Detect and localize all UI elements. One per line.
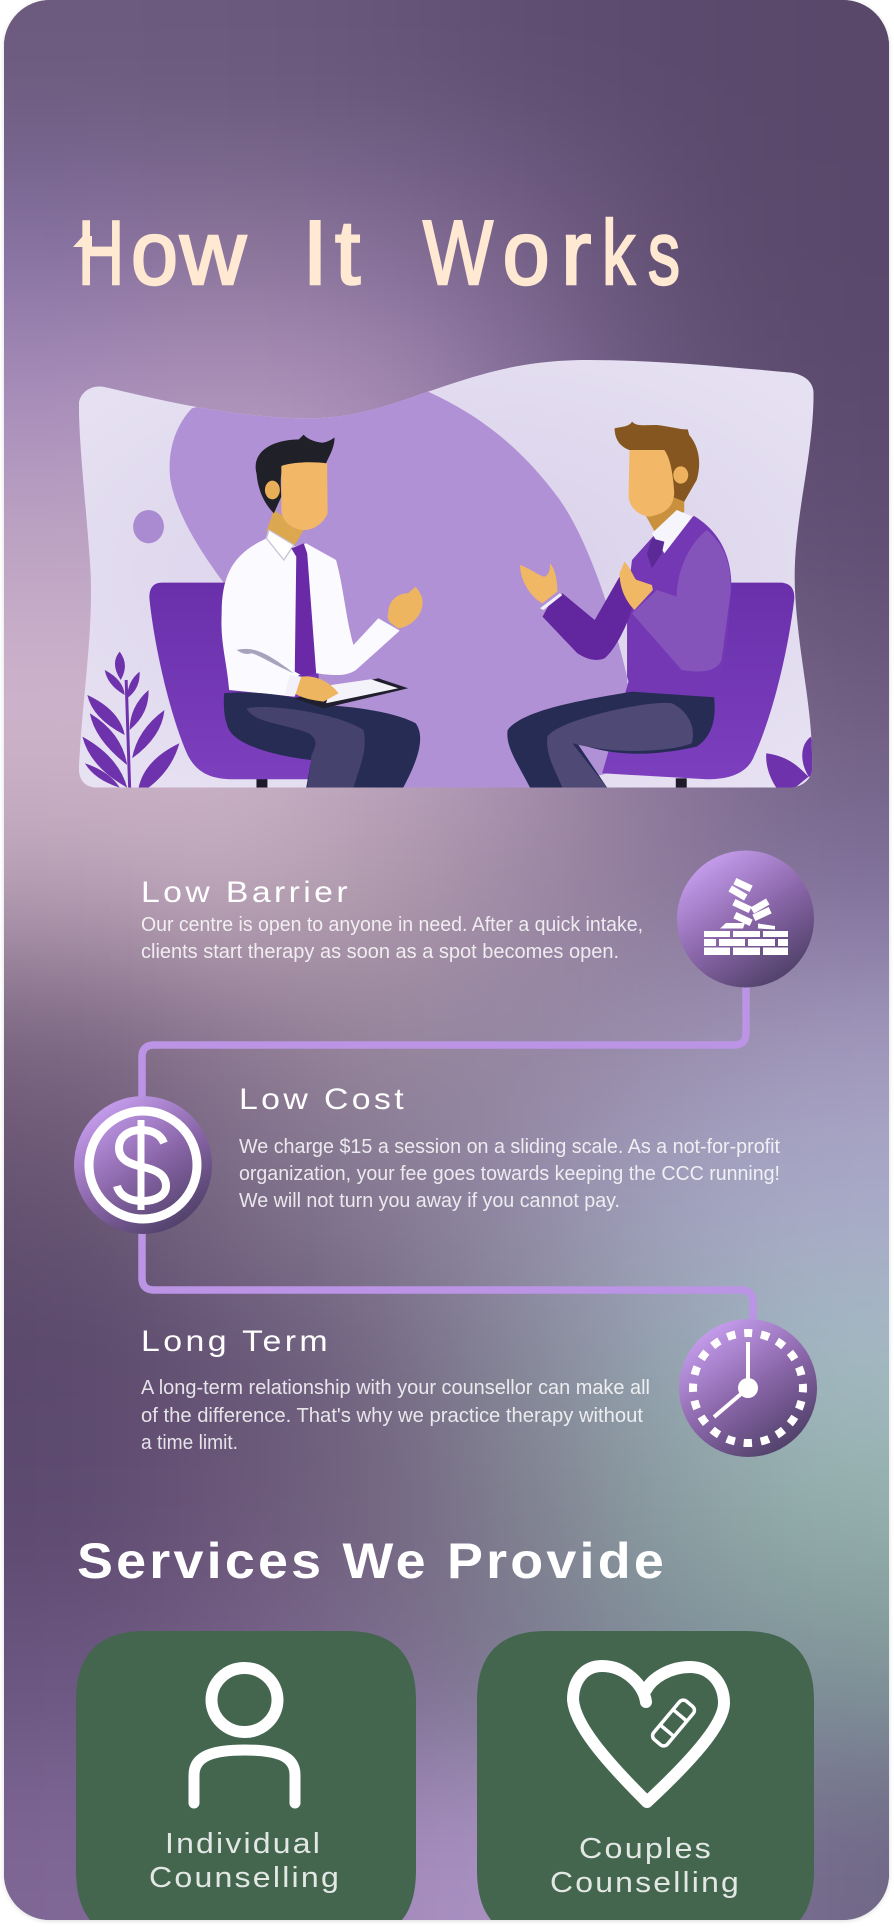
title: o bbox=[131, 203, 178, 304]
plant left bbox=[82, 652, 179, 788]
title: r bbox=[561, 203, 591, 304]
plant right bbox=[766, 737, 816, 788]
card: individual counselling: Counselling bbox=[149, 1862, 341, 1894]
title: o bbox=[503, 203, 550, 304]
step: long term bbox=[141, 1325, 650, 1454]
illustration: counsellor and client bbox=[60, 360, 840, 788]
icon: dollar coin bbox=[74, 1096, 212, 1234]
title: W bbox=[423, 203, 493, 304]
body text bbox=[141, 914, 643, 963]
title: s bbox=[648, 203, 680, 304]
left chair bbox=[149, 583, 319, 788]
title: k bbox=[602, 203, 635, 304]
body text: of the difference. That's why we practice therapy without bbox=[141, 1405, 643, 1427]
illustration backdrop bbox=[60, 360, 840, 788]
body text: We will not turn you away if you cannot pay. bbox=[239, 1190, 620, 1212]
title: t bbox=[335, 203, 360, 304]
heading: Long Term bbox=[141, 1325, 331, 1358]
title: I bbox=[302, 203, 328, 304]
icon: person bbox=[194, 1668, 295, 1803]
icon: mended heart bbox=[573, 1666, 724, 1802]
body text bbox=[239, 1136, 780, 1212]
card: individual counselling bbox=[76, 1631, 416, 1920]
label: Couples bbox=[579, 1833, 713, 1865]
title: H bbox=[78, 203, 124, 304]
icon: clock bbox=[679, 1319, 817, 1457]
heading: services: Services We Provide bbox=[77, 1533, 667, 1589]
card: couples counselling: Counselling bbox=[550, 1867, 741, 1899]
body text bbox=[141, 1377, 650, 1454]
body text: organization, your fee goes towards keeping the CCC running! bbox=[239, 1163, 780, 1185]
card: couples counselling bbox=[477, 1631, 814, 1920]
body text: a time limit. bbox=[141, 1432, 238, 1454]
body text: clients start therapy as soon as a spot becomes open. bbox=[141, 941, 619, 963]
heading: Low Barrier bbox=[141, 876, 351, 909]
body text: We charge $15 a session on a sliding scale. As a not-for-profit bbox=[239, 1136, 780, 1158]
title: w bbox=[179, 203, 246, 304]
right chair bbox=[602, 583, 794, 788]
timeline connector bbox=[142, 985, 753, 1322]
purple blob bbox=[170, 377, 632, 788]
decorative dot bbox=[133, 510, 164, 543]
title bbox=[73, 203, 680, 304]
heading: Low Cost bbox=[239, 1083, 407, 1116]
body text: Our centre is open to anyone in need. After a quick intake, bbox=[141, 914, 643, 936]
body text: A long-term relationship with your counsellor can make all bbox=[141, 1377, 650, 1399]
step: low barrier bbox=[141, 876, 643, 963]
man right bbox=[507, 422, 731, 788]
man left bbox=[221, 435, 423, 788]
label: Individual bbox=[165, 1828, 322, 1860]
icon: falling bricks bbox=[677, 850, 814, 988]
step: low cost bbox=[239, 1083, 780, 1212]
